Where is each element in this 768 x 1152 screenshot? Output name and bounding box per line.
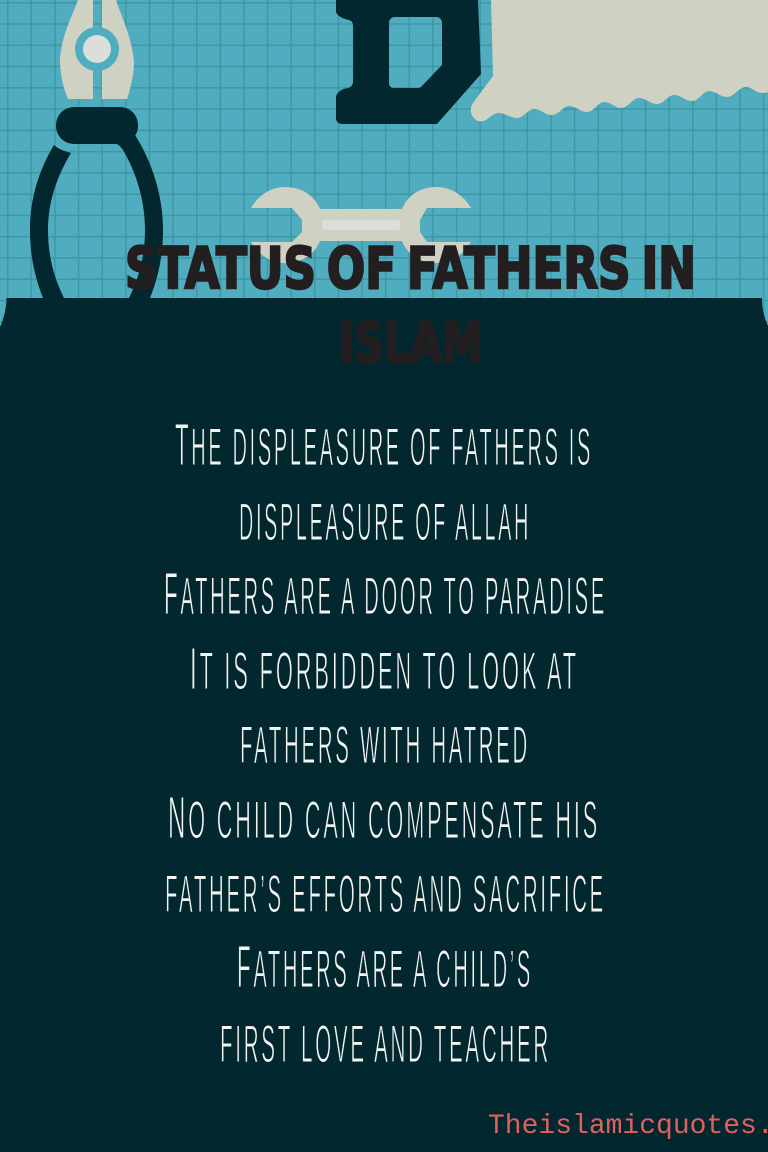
icon: saw blade bbox=[471, 0, 768, 121]
footer: website credit: Theislamicquotes. bbox=[488, 1111, 768, 1142]
title bbox=[125, 236, 696, 375]
panel: dark pocket bbox=[0, 298, 768, 1152]
icon: wrench bbox=[251, 187, 471, 263]
text block: statements about fathers bbox=[164, 412, 607, 1074]
icon: pliers bbox=[30, 0, 163, 298]
title: ISLAM bbox=[339, 311, 483, 375]
background: teal blueprint grid bbox=[0, 0, 768, 335]
icon: letter D block bbox=[336, 0, 481, 124]
